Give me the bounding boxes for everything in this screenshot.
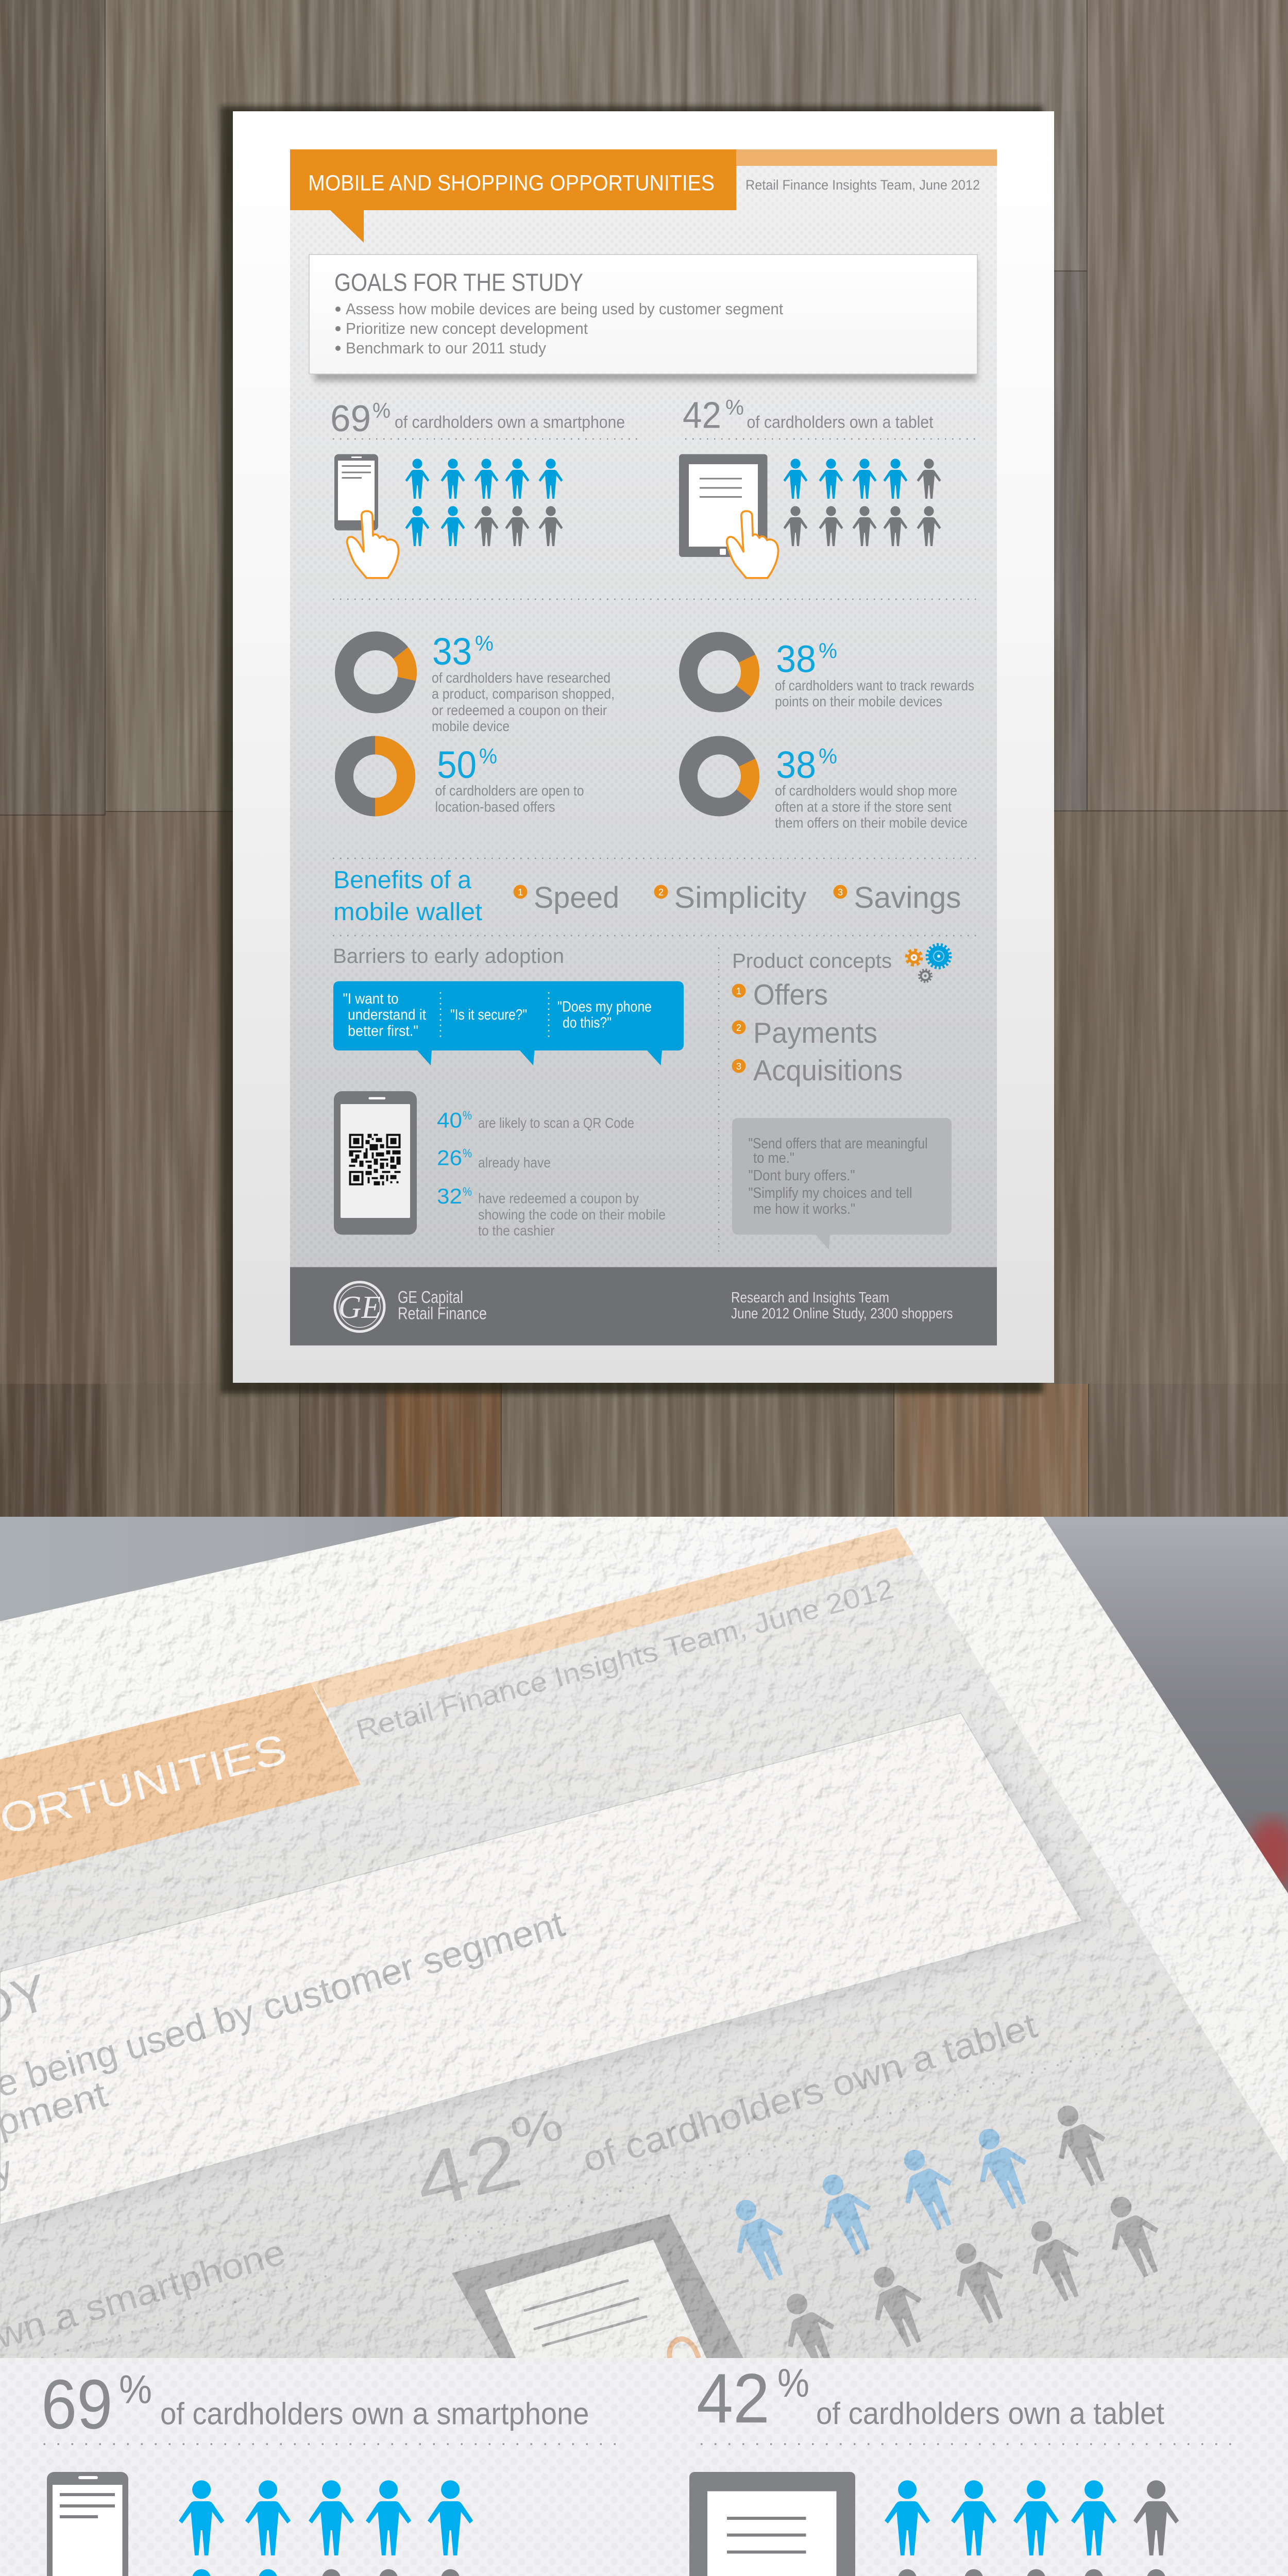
goals list: Prioritize new concept development: [346, 319, 588, 337]
subtitle: Retail Finance Insights Team, June 2012: [745, 177, 980, 193]
stat: 38 percent offers: them offers on their mobile device: [775, 815, 968, 831]
donut chart: 38 percent rewards: [688, 641, 759, 703]
QR stat: 32 percent: 32: [437, 1184, 462, 1208]
smartphone stat heading: 69: [330, 398, 371, 439]
concept: offers: Offers: [753, 978, 828, 1011]
QR stat: 40 percent: [437, 1108, 634, 1132]
benefit: speed: Speed: [534, 881, 619, 914]
goals card: [309, 255, 977, 381]
quote 1: better first.": [348, 1023, 418, 1040]
stat: 38 percent offers: [775, 743, 968, 831]
smartphone stat heading large: [41, 2365, 589, 2443]
people figures: [719, 2096, 1174, 2382]
QR code: [349, 1134, 401, 1185]
smartphone stat heading large: 69: [41, 2365, 112, 2443]
goals list: Benchmark to our 2011 study: [346, 339, 546, 357]
goals text: e being used by customer segment: [0, 1903, 569, 2105]
GE logo: [335, 1282, 384, 1331]
goals card: [0, 1713, 1082, 2225]
tablet stat text: 42: [406, 2116, 529, 2225]
stat: 38 percent rewards: of cardholders want to track rewards: [775, 677, 974, 693]
icon: gears: [907, 945, 950, 982]
stat: 33 percent: mobile device: [432, 718, 510, 734]
stat: 33 percent: or redeemed a coupon on their: [432, 702, 607, 718]
icon: smartphone with hand: [334, 454, 399, 578]
concept: acquisitions: 3: [736, 1061, 741, 1072]
company name: GE Capital: [398, 1287, 463, 1307]
smartphone stat heading: [330, 398, 625, 439]
benefits of a mobile wallet: [333, 867, 961, 926]
goals text: [0, 1903, 569, 2192]
quote 1: understand it: [348, 1007, 426, 1023]
smartphone stat heading: %: [372, 398, 391, 422]
GE logo: GE: [338, 1290, 381, 1325]
wood background: [0, 0, 1288, 1517]
gray speech bubble: "Simplify my choices and tell: [748, 1185, 912, 1201]
tablet stat text: %: [506, 2098, 568, 2160]
subtitle text: Retail Finance Insights Team, June 2012: [353, 1573, 897, 1746]
QR stat: 32 percent: %: [463, 1185, 472, 1199]
mockup photo: [0, 1517, 1288, 2382]
barriers heading: Barriers to early adoption: [333, 945, 564, 968]
concept: offers: 1: [736, 986, 741, 996]
smartphone stat heading large: of cardholders own a smartphone: [160, 2397, 589, 2431]
smartphone stat heading: of cardholders own a smartphone: [395, 412, 625, 432]
quote 3: do this?": [563, 1015, 612, 1031]
benefit: simplicity: Simplicity: [674, 881, 807, 914]
stat: 33 percent: %: [475, 631, 494, 655]
tablet stat heading large: %: [777, 2360, 809, 2405]
gray speech bubble: [732, 1118, 952, 1250]
stat: 38 percent offers: 38: [776, 743, 816, 786]
gray speech bubble: "Send offers that are meaningful: [748, 1136, 927, 1152]
gray speech bubble: me how it works.": [753, 1201, 855, 1217]
donut chart: 38 percent offers: [688, 745, 759, 807]
stat: 50 percent: location-based offers: [435, 799, 555, 815]
stat: 50 percent: of cardholders are open to: [435, 783, 584, 799]
benefits of a mobile wallet: mobile wallet: [333, 899, 482, 926]
benefit: simplicity: 2: [658, 887, 664, 897]
quote 3: [557, 998, 652, 1031]
blue speech bubble: [333, 981, 684, 1065]
textured paper: [0, 1517, 1288, 2358]
stat: 33 percent: of cardholders have researched: [432, 670, 611, 686]
QR stat: 32 percent: have redeemed a coupon by: [478, 1190, 639, 1207]
benefits of a mobile wallet: Benefits of a: [333, 867, 471, 894]
goals list: Assess how mobile devices are being used by customer segment: [346, 300, 783, 318]
poster sheet: [233, 111, 1054, 1383]
QR stat: 40 percent: 40: [437, 1108, 462, 1132]
people chart: 69 percent: [405, 459, 563, 546]
stat: 33 percent: a product, comparison shopped,: [432, 686, 615, 702]
gray speech bubble: to me.": [753, 1150, 794, 1166]
tablet stat heading large: [697, 2359, 1164, 2437]
title: MOBILE AND SHOPPING OPPORTUNITIES: [308, 171, 715, 196]
stat: 38 percent rewards: [775, 638, 974, 709]
benefit: savings: 3: [838, 887, 843, 897]
icon: smartphone with hand large: [47, 2472, 166, 2576]
goals heading: GOALS FOR THE STUDY: [334, 269, 583, 297]
inner panel: [290, 149, 997, 1267]
quote 1: "I want to: [343, 991, 399, 1007]
stat: 38 percent offers: %: [819, 744, 837, 768]
product concepts heading: Product concepts: [732, 950, 892, 973]
header banner: [290, 149, 997, 243]
tablet stat heading: %: [725, 395, 744, 419]
people chart: 42 percent: [783, 459, 941, 546]
stat: 50 percent: 50: [437, 743, 477, 786]
tablet stat heading: [683, 395, 934, 436]
goals list: [335, 300, 783, 357]
gray speech bubble: "Dont bury offers.": [748, 1167, 855, 1184]
footer: [290, 1267, 997, 1346]
tablet stat text: of cardholders own a tablet: [578, 2005, 1041, 2180]
icon: tablet with hand: [679, 454, 778, 578]
goals card shadow: [0, 1721, 1097, 2236]
stat: 33 percent: [432, 630, 615, 734]
QR stat: 40 percent: %: [463, 1109, 472, 1123]
tablet stat heading large: 42: [697, 2359, 770, 2437]
poster shadow: [221, 106, 1043, 1394]
QR stat: 26 percent: %: [463, 1147, 472, 1160]
stat: 38 percent offers: often at a store if the store sent: [775, 799, 952, 815]
smartphone stat heading large: %: [119, 2367, 152, 2412]
quote 3: "Does my phone: [557, 998, 652, 1015]
quote 2: "Is it secure?": [450, 1007, 527, 1023]
benefit: savings: Savings: [854, 881, 961, 914]
tablet icon: [452, 2214, 743, 2358]
stat: 50 percent: %: [479, 744, 497, 768]
concept: payments: Payments: [753, 1016, 877, 1049]
orange banner: [0, 1683, 361, 1881]
paper texture overlay: [0, 1517, 1288, 2358]
tablet stat heading: 42: [683, 395, 721, 436]
people chart large: 69 percent: [179, 2480, 473, 2576]
company name: Retail Finance: [398, 1303, 487, 1323]
QR stat: 26 percent: already have: [478, 1155, 551, 1171]
QR stat: 40 percent: are likely to scan a QR Code: [478, 1115, 634, 1131]
orange strip: [311, 1528, 913, 1709]
stat: 38 percent offers: of cardholders would shop more: [775, 783, 957, 799]
QR stat: 26 percent: 26: [437, 1146, 462, 1170]
tablet stat heading: of cardholders own a tablet: [747, 412, 934, 432]
QR stat: 32 percent: showing the code on their mobile: [478, 1207, 666, 1223]
concept: acquisitions: Acquisitions: [753, 1054, 903, 1087]
tablet stat text: [0, 2005, 1041, 2357]
study credits: June 2012 Online Study, 2300 shoppers: [731, 1306, 953, 1322]
stat: 38 percent rewards: 38: [776, 638, 816, 680]
donut chart: 33 percent: [344, 641, 417, 704]
icon: phone with QR code: [334, 1091, 417, 1234]
people chart large: 42 percent: [885, 2480, 1179, 2576]
product concepts: [732, 945, 950, 1087]
icon: tablet with hand large: [689, 2472, 875, 2576]
benefit: speed: 1: [518, 887, 523, 897]
company name: [398, 1287, 487, 1323]
concept: payments: 2: [736, 1023, 741, 1033]
QR stat: 32 percent: to the cashier: [478, 1223, 554, 1239]
blurred backdrop: [0, 1517, 1288, 1929]
QR stat: 32 percent: [437, 1184, 666, 1239]
donut chart: 50 percent: [344, 736, 415, 816]
enlarged detail section: [0, 2358, 1288, 2576]
stat: 50 percent: [435, 743, 584, 815]
banner text: ORTUNITIES: [0, 1725, 292, 1843]
QR stat: 26 percent: [437, 1146, 551, 1171]
stat: 38 percent rewards: points on their mobile devices: [775, 693, 942, 709]
printed gray panel: [0, 1554, 1288, 2358]
study credits: Research and Insights Team: [731, 1290, 889, 1306]
stat: 33 percent: 33: [432, 630, 472, 673]
tablet stat heading large: of cardholders own a tablet: [816, 2396, 1164, 2431]
quote 1: [343, 991, 426, 1040]
study credits: [731, 1290, 953, 1322]
stat: 38 percent rewards: %: [819, 639, 837, 663]
